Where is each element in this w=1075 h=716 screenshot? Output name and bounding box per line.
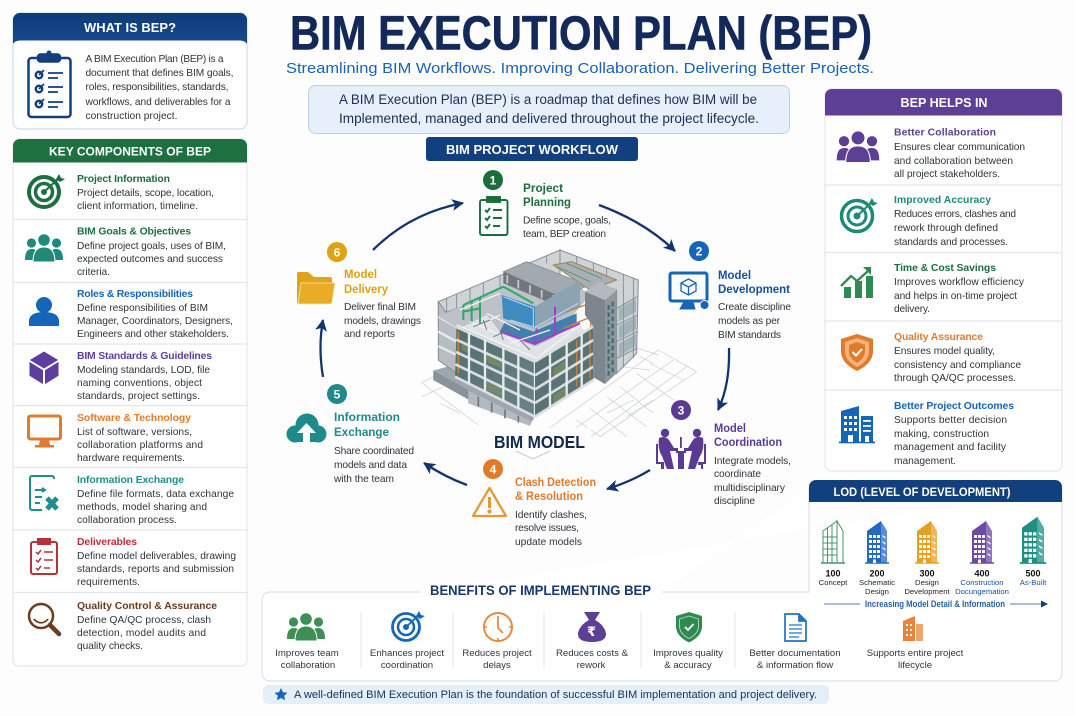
item: BIM goals: expected outcomes and success — [77, 254, 223, 265]
arrow: coordination to clash detection — [607, 470, 650, 489]
arrow: exchange to delivery — [320, 320, 323, 377]
LOD 200 — [859, 521, 895, 596]
item: deliverables: Deliverables — [77, 537, 137, 548]
item: project information: client information, timeline. — [77, 201, 198, 212]
item: improved accuracy: Improved Accuracy — [894, 195, 991, 206]
item: deliverables: standards, reports and submission — [77, 564, 234, 575]
item: quality assurance: consistency and compliance — [894, 360, 1021, 371]
step 2: model development — [670, 241, 791, 341]
benefit: costs and rework: rework — [577, 660, 606, 671]
icon: warning — [473, 488, 506, 516]
benefit: team collaboration: collaboration — [281, 660, 335, 671]
icon: person — [29, 297, 59, 326]
item: time and cost savings: Improves workflow efficiency — [894, 277, 1025, 288]
intro callout: A BIM Execution Plan (BEP) is a roadmap that defines how BIM will be — [339, 92, 757, 107]
item: quality control: detection, model audits and — [77, 628, 206, 639]
step 6: model delivery — [297, 242, 421, 340]
benefit: project coordination — [370, 611, 444, 671]
step 5: information exchange: 5 — [334, 388, 341, 402]
icon: monitor — [28, 416, 60, 448]
step 3: model coordination: coordinate — [714, 469, 761, 480]
item: quality control: quality checks. — [77, 641, 143, 652]
icon: target — [29, 174, 65, 207]
step 5: information exchange: Information — [334, 410, 400, 424]
step 2: model development: Development — [718, 282, 790, 296]
LOD 300: Design — [915, 578, 939, 587]
icon: shield green — [676, 612, 702, 642]
heading: what is BEP — [13, 13, 247, 44]
benefit: project lifecycle: lifecycle — [898, 660, 932, 671]
item: BIM goals — [25, 226, 226, 278]
step 4: clash detection: resolve issues, — [515, 523, 579, 534]
text: what is BEP: workflows, and deliverables for a — [84, 97, 231, 108]
benefit: project delays — [462, 613, 532, 671]
step 1: project planning: Define scope, goals, — [523, 216, 611, 226]
item: deliverables: requirements. — [77, 577, 140, 588]
step 1: project planning: team, BEP creation — [523, 229, 606, 240]
item: information exchange — [30, 475, 234, 526]
item: roles — [29, 289, 233, 340]
step 1: project planning: 1 — [490, 174, 497, 188]
building model illustration — [422, 250, 697, 440]
icon: folder — [297, 272, 335, 304]
icon: team green — [287, 613, 325, 641]
item: BIM goals: criteria. — [77, 267, 110, 278]
benefit: project delays: Reduces project — [462, 648, 532, 659]
LOD 400: 400 — [974, 568, 990, 578]
icon: cloud upload — [286, 414, 326, 444]
text: what is BEP: document that defines BIM goals, — [86, 68, 234, 79]
benefit: project coordination: coordination — [381, 660, 433, 671]
benefit: project coordination: Enhances project — [370, 648, 444, 659]
roof slab — [438, 273, 590, 361]
benefit: project lifecycle — [867, 616, 964, 671]
LOD 200: 200 — [869, 568, 885, 578]
icon: checklist — [480, 197, 508, 235]
LOD 100: Concept — [819, 578, 848, 587]
benefit: project lifecycle: Supports entire project — [867, 648, 964, 659]
benefit: project delays: delays — [483, 660, 511, 671]
step 5: information exchange: Exchange — [334, 425, 389, 439]
title: BIM EXECUTION PLAN (BEP) — [290, 6, 872, 60]
benefit: quality — [653, 612, 723, 671]
item: better collaboration: Ensures clear communication — [894, 142, 1025, 153]
step 2: model development: 2 — [696, 244, 703, 258]
item: time and cost savings: and helps in on-time project — [894, 291, 1017, 302]
item: quality assurance — [841, 332, 1021, 384]
panel outline: LOD and benefits — [262, 488, 1062, 681]
icon: shield orange — [841, 334, 873, 371]
step 1: project planning — [480, 170, 611, 240]
icon: clipboard — [28, 50, 70, 117]
icon: team purple — [837, 131, 879, 163]
ground plan drawing — [422, 347, 697, 440]
step 1: project planning: Project — [523, 181, 563, 195]
concrete core — [585, 282, 617, 300]
icon: target blue — [392, 611, 425, 640]
left frame bays — [438, 302, 457, 373]
step 2: model development: BIM standards — [718, 330, 781, 341]
panel: LOD — [809, 480, 1062, 609]
icon: monitor with cube — [670, 273, 709, 310]
step 3: model coordination — [656, 400, 791, 507]
item: improved accuracy — [842, 195, 1016, 248]
item: standards — [29, 351, 212, 402]
LOD progress arrow: Increasing Model Detail & Information — [865, 599, 1005, 609]
step 1: project planning: Planning — [523, 195, 571, 209]
item: quality assurance: through QA/QC processes. — [894, 373, 1016, 384]
item: deliverables — [31, 537, 236, 588]
step 4: clash detection: update models — [515, 537, 582, 548]
item: software: hardware requirements. — [77, 453, 185, 464]
icon: magnifier — [29, 604, 59, 634]
item: better project outcomes: management and facility — [894, 442, 1007, 453]
benefit: documentation: & information flow — [757, 660, 833, 671]
item: roles: Roles & Responsibilities — [77, 289, 193, 300]
item: better project outcomes: management. — [894, 456, 956, 467]
step 5: information exchange — [286, 384, 414, 485]
benefit: team collaboration — [275, 613, 339, 671]
item: deliverables: Define model deliverables, drawing — [77, 551, 236, 562]
subtitle: Streamlining BIM Workflows. Improving Collaboration. Delivering Better Projects. — [286, 61, 874, 77]
icon: team — [25, 234, 63, 262]
benefit: documentation: Better documentation — [749, 648, 841, 659]
step 2: model development: Create discipline — [718, 302, 791, 313]
item: improved accuracy: Reduces errors, clashes and — [894, 209, 1016, 220]
panel: what is BEP — [13, 13, 247, 129]
footer callout: A well-defined BIM Execution Plan is the foundation of successful BIM implementation and project delivery. — [294, 689, 817, 701]
item: better project outcomes: making, construction — [894, 429, 989, 440]
item: project information: Project details, scope, location, — [77, 188, 214, 199]
icon: exchange document — [30, 476, 57, 510]
LOD 100: 100 — [825, 568, 841, 578]
step 5: information exchange: Share coordinated — [334, 446, 414, 457]
step 4: clash detection: 4 — [490, 462, 497, 476]
LOD 500: 500 — [1025, 568, 1041, 578]
item: better project outcomes — [839, 401, 1014, 467]
panel: key components: KEY COMPONENTS OF BEP — [49, 144, 211, 158]
rear glazing frame — [438, 250, 638, 373]
item: software — [28, 413, 203, 464]
LOD 300: Development — [904, 587, 951, 596]
item: better collaboration: all project stakeholders. — [894, 169, 1000, 180]
icon: orange building — [903, 616, 923, 641]
benefit: team collaboration: Improves team — [275, 648, 339, 659]
step 4: clash detection: Clash Detection — [515, 475, 596, 489]
icon: target teal — [842, 198, 878, 232]
icon: money bag — [578, 612, 606, 642]
item: software: List of software, versions, — [77, 427, 192, 438]
step 5: information exchange: models and data — [334, 460, 407, 471]
icon: cube — [29, 351, 59, 385]
LOD 100 — [819, 521, 848, 587]
text: what is BEP: A BIM Execution Plan (BEP) is a — [86, 54, 224, 65]
podium — [433, 250, 638, 426]
item: roles: Engineers and other stakeholders. — [77, 329, 229, 340]
panel: LOD: LOD (LEVEL OF DEVELOPMENT) — [834, 485, 1010, 499]
LOD 500 — [1020, 517, 1047, 587]
icon: star — [274, 688, 288, 700]
benefit: costs and rework: ₹ — [587, 625, 596, 640]
item: better project outcomes: Supports better decision — [894, 415, 1007, 426]
LOD 500: As-Built — [1020, 578, 1047, 587]
MEP services — [463, 287, 592, 350]
step 3: model coordination: Integrate models, — [714, 456, 791, 467]
item: information exchange: Define file formats, data exchange — [77, 489, 234, 500]
icon: document — [785, 614, 806, 641]
panel: BEP helps in: BEP HELPS IN — [900, 95, 988, 110]
heading: benefits: BENEFITS OF IMPLEMENTING BEP — [430, 582, 651, 598]
heading: BIM project workflow — [426, 137, 638, 161]
step 3: model coordination: multidisciplinary — [714, 483, 786, 494]
item: information exchange: methods, model sharing and — [77, 502, 207, 513]
LOD 400: Docungemation — [955, 587, 1009, 596]
item: time and cost savings: Time & Cost Savings — [894, 263, 996, 274]
step 3: model coordination: 3 — [678, 404, 685, 418]
item: standards: Modeling standards, LOD, file — [77, 365, 210, 376]
blue glazed atrium — [502, 295, 535, 328]
arrow: delivery to planning — [373, 203, 463, 250]
item: improved accuracy: standards and processes. — [894, 237, 1008, 248]
panel: benefits — [275, 582, 964, 671]
LOD 200: Design — [865, 587, 889, 596]
item: software: Software & Technology — [77, 413, 191, 424]
icon: meeting — [656, 429, 706, 469]
step 6: model delivery: Model — [344, 267, 377, 281]
step 3: model coordination: discipline — [714, 496, 755, 507]
panel: what is BEP: WHAT IS BEP? — [84, 20, 176, 35]
item: information exchange: collaboration process. — [77, 515, 177, 526]
front-left facade — [455, 327, 535, 417]
front-right facade — [535, 327, 593, 417]
item: project information: Project Information — [77, 174, 170, 185]
item: standards: standards, project settings. — [77, 391, 200, 402]
item: quality assurance: Quality Assurance — [894, 332, 983, 343]
building caption — [487, 428, 591, 459]
LOD 300: 300 — [919, 568, 935, 578]
step 4: clash detection — [473, 459, 596, 548]
step 6: model delivery: Deliver final BIM — [344, 302, 416, 313]
text: what is BEP: construction project. — [86, 111, 178, 122]
text: what is BEP — [84, 54, 234, 122]
step 3: model coordination: Coordination — [714, 435, 782, 449]
item: time and cost savings — [841, 263, 1025, 315]
step 5: information exchange: with the team — [333, 474, 394, 485]
item: quality control: Quality Control & Assurance — [77, 601, 217, 612]
LOD 400: Construction — [960, 578, 1004, 587]
heading: key components — [13, 139, 247, 162]
step 2: model development: Model — [718, 268, 751, 282]
item: BIM goals: Define project goals, uses of BIM, — [77, 241, 226, 252]
item: quality control — [29, 601, 217, 652]
icon: growth chart — [841, 267, 873, 298]
item: better collaboration — [837, 128, 1025, 180]
LOD 400 — [955, 521, 1009, 596]
item: standards: BIM Standards & Guidelines — [77, 351, 212, 362]
item: standards: naming conventions, object — [77, 378, 202, 389]
icon: office buildings — [839, 406, 875, 443]
item: quality assurance: Ensures model quality, — [894, 346, 995, 357]
panel: key components — [13, 139, 247, 666]
arrow: planning to development — [599, 205, 675, 251]
item: software: collaboration platforms and — [77, 440, 203, 451]
LOD 300 — [904, 521, 951, 596]
benefit: quality: & accuracy — [664, 660, 712, 671]
step 2: model development: models as per — [718, 316, 781, 327]
item: quality control: Define QA/QC process, clash — [77, 615, 211, 626]
benefit: documentation — [749, 614, 841, 671]
item: roles: Define responsibilities of BIM — [77, 303, 208, 314]
text: what is BEP: roles, responsibilities, standards, — [86, 82, 228, 93]
step 3: model coordination: Model — [714, 421, 746, 435]
building caption: BIM MODEL — [494, 432, 585, 452]
footer callout — [263, 685, 829, 704]
step 6: model delivery: Delivery — [344, 282, 388, 296]
item: better collaboration: Better Collaboration — [894, 128, 996, 138]
step 6: model delivery: models, drawings — [344, 316, 421, 327]
step 4: clash detection: Identify clashes, — [515, 510, 587, 521]
step 6: model delivery: 6 — [334, 246, 341, 260]
item: better project outcomes: Better Project Outcomes — [894, 401, 1014, 412]
item: time and cost savings: delivery. — [894, 304, 930, 315]
LOD 200: Schematic — [859, 578, 895, 587]
item: information exchange: Information Exchange — [77, 475, 184, 486]
intro callout: Implemented, managed and delivered throughout the project lifecycle. — [339, 111, 759, 126]
item: project information — [29, 174, 214, 212]
icon: clock — [484, 613, 512, 641]
item: better collaboration: and collaboration between — [894, 156, 1013, 167]
intro callout — [308, 86, 790, 134]
heading: BEP helps in — [825, 89, 1062, 116]
arrow: development to coordination — [718, 348, 729, 410]
panel: BEP helps in — [825, 89, 1062, 471]
benefit: costs and rework — [556, 612, 629, 671]
heading: BIM project workflow: BIM PROJECT WORKFLOW — [446, 142, 619, 157]
step 6: model delivery: and reports — [344, 329, 395, 340]
benefit: quality: Improves quality — [653, 648, 723, 659]
item: roles: Manager, Coordinators, Designers, — [77, 316, 233, 327]
benefit: costs and rework: Reduces costs & — [556, 648, 629, 659]
item: improved accuracy: rework through defined — [894, 223, 998, 234]
step 4: clash detection: & Resolution — [515, 489, 583, 503]
item: BIM goals: BIM Goals & Objectives — [77, 226, 191, 238]
icon: red clipboard — [31, 539, 57, 574]
heading: LOD — [809, 480, 1062, 502]
arrow: clash detection to exchange — [424, 463, 467, 485]
